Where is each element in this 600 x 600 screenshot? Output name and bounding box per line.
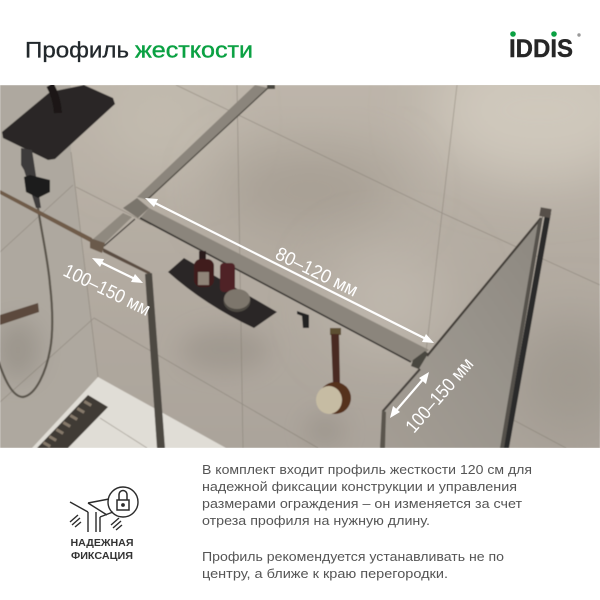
icon caption: НАДЕЖНАЯ — [70, 537, 134, 549]
shelf — [168, 258, 277, 328]
drain — [37, 395, 108, 448]
left glass frame vertical — [145, 273, 165, 448]
profile: main bar — [140, 208, 429, 362]
wall spout — [0, 303, 39, 325]
body text: В комплект входит профиль жесткости 120 см для — [202, 462, 532, 477]
body text: Профиль рекомендуется устанавливать не по — [202, 549, 504, 564]
title: Профиль — [25, 38, 129, 62]
icon: secure fixing — [70, 487, 138, 532]
holder — [24, 175, 50, 198]
label: right 100-150 mm: 100–150 мм — [402, 354, 478, 437]
left glass frame top — [0, 190, 92, 243]
body text: надежной фиксации конструкции и управления — [202, 479, 517, 494]
body text — [202, 462, 532, 581]
side wall — [0, 85, 76, 209]
right glass frame top — [383, 369, 420, 411]
brush — [316, 328, 351, 414]
panel: shower photo — [0, 85, 600, 448]
title: жесткости — [135, 38, 253, 62]
right glass frame vertical — [503, 213, 551, 448]
brush shadow — [314, 422, 335, 437]
arrow: right 100-150 mm — [390, 372, 429, 418]
hose shadow — [0, 320, 40, 380]
hand shower — [21, 148, 41, 208]
body text: центру, а ближе к краю перегородки. — [202, 566, 448, 581]
shower head — [2, 85, 115, 160]
hook — [297, 311, 309, 328]
label: 80-120 mm: 80–120 мм — [272, 244, 361, 302]
bottle — [194, 251, 214, 287]
profile: left section — [92, 213, 132, 245]
glass left edge — [380, 410, 386, 448]
icon caption: ФИКСАЦИЯ — [71, 550, 133, 562]
icon caption — [70, 537, 134, 562]
jar — [220, 263, 235, 292]
shower arm — [50, 85, 58, 113]
hose — [0, 208, 52, 397]
label: left 100-150 mm: 100–150 мм — [60, 261, 154, 321]
back wall — [70, 85, 600, 448]
right end bracket — [411, 351, 429, 370]
wall lighting — [110, 85, 600, 448]
title — [25, 38, 253, 62]
tile joints — [0, 85, 600, 448]
logo: IDDIS: IDDIS — [509, 35, 573, 63]
arrow: left 100-150 mm — [92, 258, 143, 283]
floor — [32, 377, 226, 448]
mounting plate — [123, 198, 149, 218]
body text: отреза профиля на нужную длину. — [202, 513, 430, 528]
soap dish — [224, 289, 250, 312]
arrow: 80-120 mm — [145, 198, 434, 343]
right glass pane — [383, 222, 538, 448]
shelf shadow — [186, 330, 263, 369]
body text: размерами ограждения – он изменяется за счет — [202, 496, 522, 511]
profile: upper section — [137, 85, 268, 200]
